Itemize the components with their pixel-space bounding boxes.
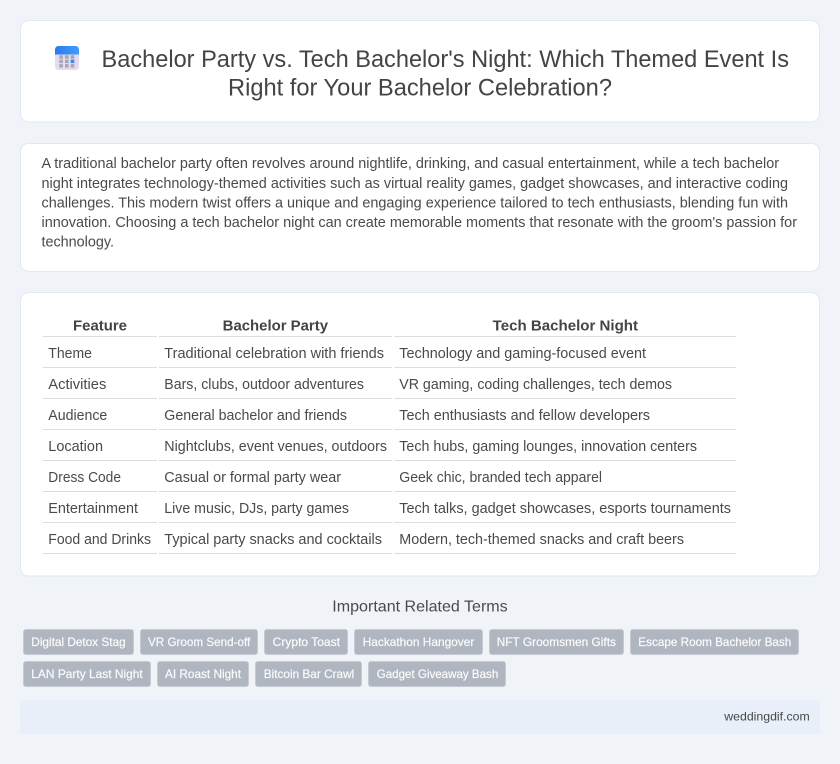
title	[102, 46, 789, 102]
tag: Gadget Giveaway Bash	[377, 667, 498, 681]
table row: Audience: Audience	[48, 408, 107, 424]
tag list: related terms	[24, 630, 798, 686]
tag: LAN Party Last Night	[31, 667, 143, 681]
tag	[630, 630, 798, 654]
table row: Entertainment: Live music, DJs, party games	[164, 501, 349, 517]
tag	[158, 662, 248, 686]
panel: introduction paragraph	[20, 144, 820, 272]
table row: Food and Drinks	[48, 532, 684, 548]
table row: Location	[48, 439, 697, 455]
table row: Entertainment: Entertainment	[48, 501, 138, 517]
table row: Dress Code: Dress Code	[48, 470, 121, 486]
table row: Entertainment	[48, 501, 731, 517]
tag: NFT Groomsmen Gifts	[497, 635, 616, 649]
text block: introduction: innovation. Choosing a tech bachelor night can create memorable moments that resonate with the groom's passion for	[42, 215, 797, 231]
text block: introduction: technology.	[42, 234, 114, 250]
tag	[490, 630, 624, 654]
tag: Digital Detox Stag	[31, 635, 126, 649]
tag: Hackathon Hangover	[363, 635, 474, 649]
tag	[140, 630, 258, 654]
table row: Entertainment: Tech talks, gadget showcases, esports tournaments	[399, 501, 731, 517]
tag	[24, 662, 150, 686]
table header row: Bachelor Party	[223, 318, 328, 334]
tag	[264, 630, 348, 654]
icon: calendar	[55, 46, 79, 70]
table row: Activities: VR gaming, coding challenges, tech demos	[399, 377, 672, 393]
table row: Location: Location	[48, 439, 103, 455]
panel: title header	[20, 20, 820, 122]
panel: comparison table	[20, 292, 820, 576]
table row: Activities: Bars, clubs, outdoor adventures	[164, 377, 364, 393]
table row: Theme	[48, 346, 646, 362]
table row: Food and Drinks: Modern, tech-themed snacks and craft beers	[399, 532, 684, 548]
tag: AI Roast Night	[165, 667, 242, 681]
table row: Food and Drinks: Food and Drinks	[48, 532, 151, 548]
table header row: Feature	[73, 318, 127, 334]
tag: Escape Room Bachelor Bash	[638, 635, 791, 649]
title: Bachelor Party vs. Tech Bachelor's Night: Which Themed Event Is	[102, 46, 789, 73]
title: Right for Your Bachelor Celebration?	[228, 74, 612, 102]
tag	[354, 630, 482, 654]
table row: Location: Tech hubs, gaming lounges, innovation centers	[399, 439, 697, 455]
table row: Audience: Tech enthusiasts and fellow developers	[399, 408, 650, 424]
text block: introduction	[42, 156, 797, 250]
tag	[24, 630, 134, 654]
table row: Dress Code	[48, 470, 602, 486]
table row: Activities	[48, 377, 672, 393]
table row: Audience: General bachelor and friends	[164, 408, 347, 424]
table row: Dress Code: Casual or formal party wear	[164, 470, 341, 486]
table row: Audience	[48, 408, 650, 424]
table header row	[73, 318, 638, 334]
tag: Crypto Toast	[273, 635, 341, 649]
table row: Theme: Technology and gaming-focused event	[399, 346, 646, 362]
tag	[256, 662, 362, 686]
text block: introduction: A traditional bachelor party often revolves around nightlife, drinking, and casual entertainment, while a tech bachelor	[42, 156, 779, 172]
footer: weddingdif.com	[723, 710, 810, 724]
tag: VR Groom Send-off	[148, 635, 251, 649]
heading: important related terms: Important Related Terms	[332, 598, 508, 616]
table header row: Tech Bachelor Night	[493, 318, 638, 334]
tag	[368, 662, 506, 686]
table row: Location: Nightclubs, event venues, outdoors	[164, 439, 387, 455]
table row: Theme: Theme	[48, 346, 92, 362]
table row: Theme: Traditional celebration with friends	[164, 346, 384, 362]
table row: Activities: Activities	[48, 377, 106, 393]
text block: introduction: night integrates technology-themed activities such as virtual reality games, gadget showcases, and interactive coding	[42, 176, 788, 192]
table row: Food and Drinks: Typical party snacks and cocktails	[164, 532, 382, 548]
tag: Bitcoin Bar Crawl	[264, 667, 354, 681]
footer	[20, 700, 820, 734]
table row: Dress Code: Geek chic, branded tech apparel	[399, 470, 602, 486]
text block: introduction: challenges. This modern twist offers a unique and engaging experience tailored to tech enthusiasts, blending fun with	[42, 196, 788, 212]
